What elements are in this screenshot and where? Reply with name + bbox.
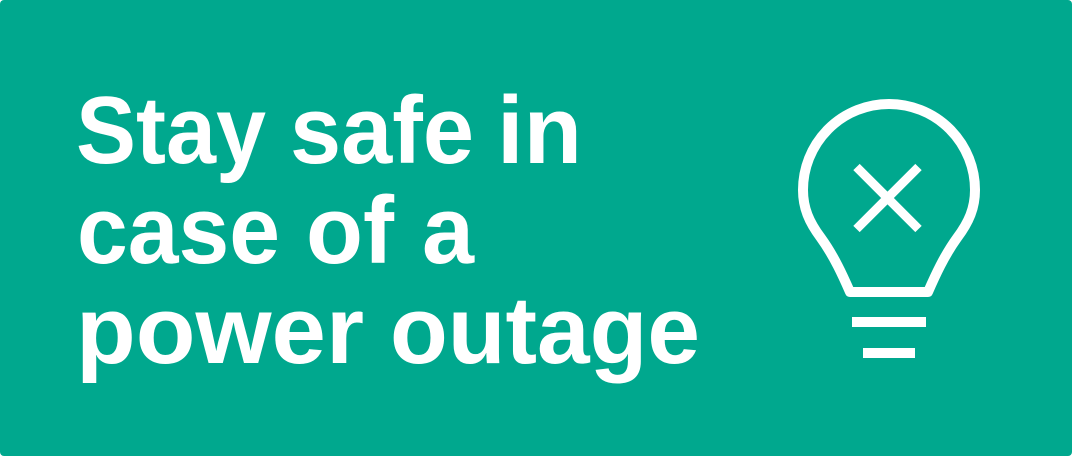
bulb outline xyxy=(803,104,975,292)
title: outage xyxy=(390,277,700,384)
x mark xyxy=(856,167,918,229)
title: of xyxy=(306,177,395,284)
title: safe xyxy=(290,77,474,184)
title: Stay xyxy=(76,77,266,184)
bulb base line lower xyxy=(863,348,915,358)
bulb base line upper xyxy=(852,317,926,327)
title: in xyxy=(497,77,582,184)
title xyxy=(76,77,700,384)
icon: broken light bulb xyxy=(803,104,975,358)
title: a xyxy=(422,177,475,284)
title: power xyxy=(76,277,364,384)
title: case xyxy=(77,177,280,284)
